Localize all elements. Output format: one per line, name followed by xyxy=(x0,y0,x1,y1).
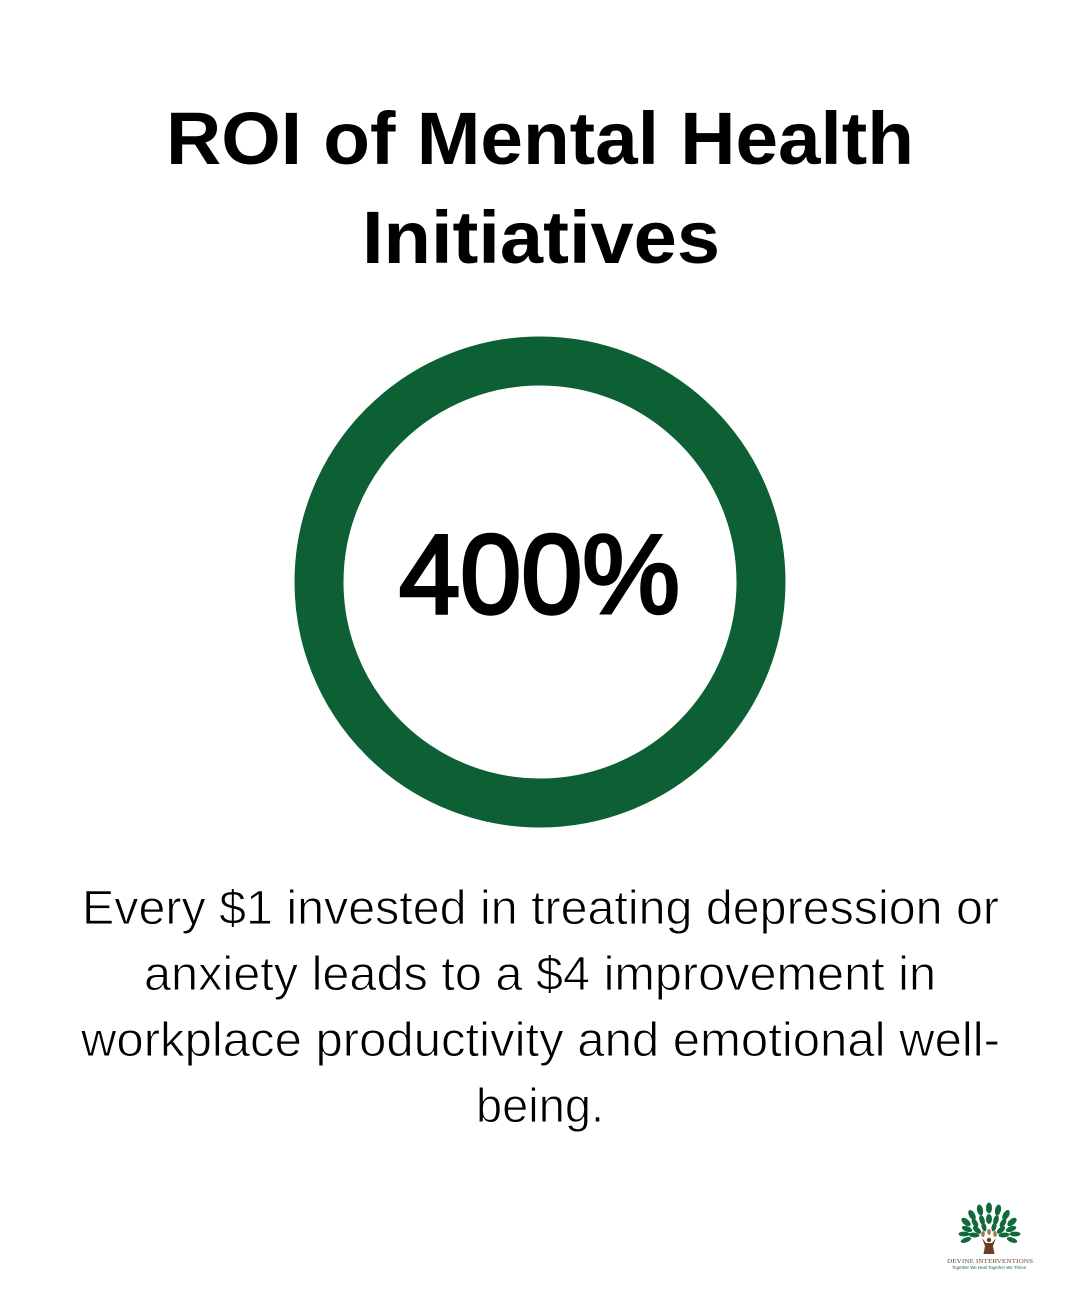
title: ROI of Mental Health xyxy=(166,97,914,180)
logo name: DEVINE INTERVENTIONS xyxy=(947,1258,1033,1265)
description text: anxiety leads to a $4 improvement in xyxy=(144,948,936,1001)
description text xyxy=(80,882,1000,1133)
stat value: 400% xyxy=(399,512,680,637)
icon: tree leaves xyxy=(958,1202,1020,1244)
logo tagline: Together We Heal Together We Thrive xyxy=(952,1265,1026,1270)
title: Initiatives xyxy=(362,196,720,279)
description text: being. xyxy=(476,1080,604,1133)
donut ring xyxy=(319,361,761,803)
title xyxy=(166,97,914,279)
description text: workplace productivity and emotional well- xyxy=(80,1014,1000,1067)
logo: Devine Interventions xyxy=(947,1202,1033,1270)
description text: Every $1 invested in treating depression or xyxy=(82,882,999,935)
icon: figure trunk xyxy=(981,1229,997,1254)
